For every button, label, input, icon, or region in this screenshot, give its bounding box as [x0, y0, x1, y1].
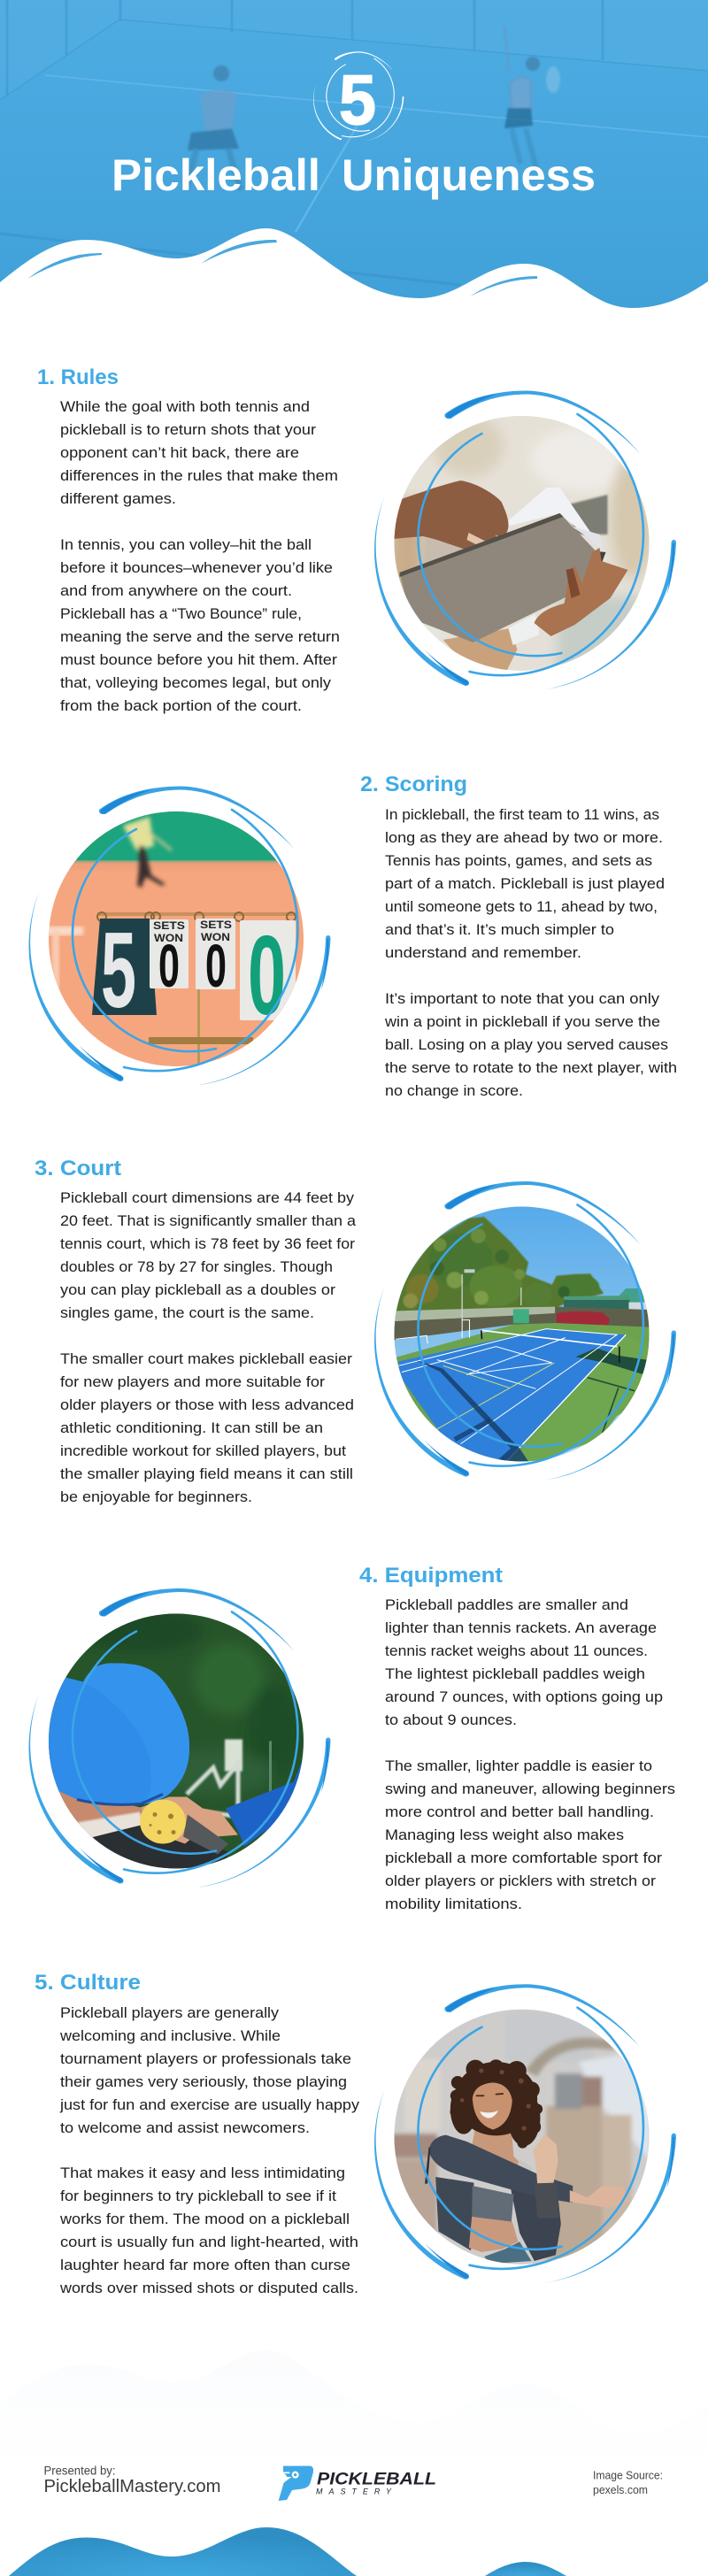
- text block: rules: pickleball is to return shots that your: [60, 421, 316, 438]
- text block: court: the smaller playing field means it can still: [60, 1465, 353, 1482]
- decorative image rings: [29, 786, 330, 1085]
- panel: court: [35, 1157, 676, 1505]
- curly hair: [450, 2059, 543, 2149]
- panel: scoring: [29, 773, 677, 1099]
- text block: rules: [60, 398, 340, 714]
- text block: court: The smaller court makes pickleball easier: [60, 1350, 352, 1367]
- text block: court: singles game, the court is the same.: [60, 1304, 314, 1321]
- text block: equipment: pickleball a more comfortable sport for: [385, 1849, 662, 1866]
- text block: culture: just for fun and exercise are usually happy: [59, 2096, 360, 2113]
- text block: scoring: the serve to rotate to the next player, with: [385, 1059, 677, 1076]
- footer credit: image source: [593, 2469, 663, 2496]
- text block: equipment: lighter than tennis rackets. An average: [385, 1619, 657, 1636]
- text block: culture: Pickleball players are generally: [60, 2004, 280, 2021]
- blurred player: [123, 817, 172, 888]
- text block: scoring: In pickleball, the first team to 11 wins, as: [385, 806, 659, 823]
- text block: culture: court is usually fun and light-hearted, with: [60, 2234, 358, 2250]
- text block: rules: before it bounces–whenever you’d like: [60, 559, 333, 576]
- number 5: 5: [339, 60, 376, 139]
- heading: rules: 1. Rules: [37, 365, 119, 389]
- decorative image rings: [374, 1984, 676, 2283]
- heading: court: 3. Court: [35, 1157, 121, 1180]
- logo: Pickleball Mastery: MASTERY: [316, 2487, 392, 2495]
- text block: rules: While the goal with both tennis and: [60, 398, 310, 415]
- text block: scoring: [384, 806, 677, 1099]
- text block: court: 20 feet. That is significantly smaller than a: [60, 1212, 357, 1229]
- photo: tennis scoreboard: WON: [201, 931, 230, 943]
- panel: equipment: [29, 1564, 675, 1912]
- footer credit: image source: Image Source:: [593, 2469, 663, 2481]
- text block: court: older players or those with less advanced: [60, 1396, 354, 1413]
- logo mark: [279, 2466, 313, 2501]
- text block: scoring: Tennis has points, games, and sets as: [385, 852, 652, 869]
- text block: culture: to welcome and assist newcomers.: [60, 2119, 310, 2136]
- text block: scoring: no change in score.: [385, 1082, 523, 1099]
- photo: blue paddle and yellow ball: [43, 1609, 309, 1874]
- text block: culture: laughter heard far more often than curse: [60, 2257, 350, 2273]
- footer credit: presented by: PickleballMastery.com: [44, 2477, 221, 2496]
- header photo: two players on a blue court: [0, 0, 708, 337]
- text block: scoring: win a point in pickleball if you serve the: [384, 1013, 660, 1030]
- text block: culture: That makes it easy and less intimidating: [60, 2165, 345, 2181]
- text block: scoring: long as they are ahead by two or more.: [385, 829, 663, 846]
- header banner: [0, 0, 708, 338]
- text block: equipment: The lightest pickleball paddles weigh: [385, 1665, 645, 1682]
- text block: rules: different games.: [60, 490, 176, 507]
- text block: scoring: and that’s it. It’s much simpler to: [385, 921, 614, 938]
- bottom wave: [9, 2527, 566, 2576]
- text block: rules: and from anywhere on the court.: [60, 582, 292, 599]
- number badge: [313, 51, 404, 142]
- decorative image rings: [374, 1181, 676, 1480]
- text block: rules: Pickleball has a “Two Bounce” rule,: [60, 605, 302, 622]
- text block: culture: [59, 2004, 360, 2296]
- text block: court: for new players and more suitable for: [60, 1373, 325, 1390]
- panel: rules: [37, 365, 676, 714]
- panel: culture: [35, 1971, 676, 2296]
- text block: equipment: [385, 1596, 675, 1912]
- text block: scoring: It’s important to note that you can only: [385, 990, 660, 1007]
- decorative image rings: [29, 1588, 330, 1888]
- text block: court: be enjoyable for beginners.: [60, 1488, 252, 1505]
- wave swooshes: [27, 240, 537, 296]
- text block: court: doubles or 78 by 27 for singles. Though: [60, 1258, 333, 1275]
- text block: equipment: Managing less weight also makes: [385, 1826, 624, 1843]
- text block: culture: welcoming and inclusive. While: [59, 2027, 281, 2044]
- text block: culture: tournament players or professionals take: [60, 2050, 351, 2067]
- number rings: [313, 51, 404, 142]
- text block: equipment: around 7 ounces, with options going up: [385, 1688, 663, 1705]
- text block: scoring: understand and remember.: [385, 944, 581, 961]
- text block: court: tennis court, which is 78 feet by 36 feet for: [60, 1235, 355, 1252]
- photo: tennis scoreboard: SETS: [153, 919, 185, 932]
- photo: tennis scoreboard: 5: [101, 910, 136, 1030]
- text block: equipment: older players or picklers with stretch or: [385, 1872, 656, 1889]
- text block: court: Pickleball court dimensions are 44 feet by: [60, 1189, 355, 1206]
- text block: rules: that, volleying becomes legal, but only: [60, 674, 332, 691]
- text block: scoring: ball. Losing on a play you served causes: [385, 1036, 668, 1053]
- text block: rules: opponent can’t hit back, there are: [60, 444, 299, 461]
- text block: equipment: mobility limitations.: [385, 1895, 522, 1912]
- text block: rules: meaning the serve and the serve return: [60, 628, 340, 645]
- text block: scoring: part of a match. Pickleball is just played: [385, 875, 665, 892]
- text block: equipment: swing and maneuver, allowing beginners: [385, 1780, 675, 1797]
- photo: tennis scoreboard: [43, 806, 309, 1072]
- title: Uniqueness: [342, 150, 596, 200]
- decorative image rings: [374, 391, 676, 690]
- text block: equipment: The smaller, lighter paddle is easier to: [385, 1757, 652, 1774]
- photo: tennis scoreboard: 0: [158, 932, 180, 1000]
- photo: outdoor blue court: [395, 1207, 650, 1462]
- text block: equipment: to about 9 ounces.: [385, 1711, 517, 1728]
- text block: court: incredible workout for skilled players, but: [60, 1442, 346, 1459]
- footer wave: faint background: [0, 2350, 708, 2469]
- footer credit: presented by: Presented by:: [44, 2464, 115, 2478]
- heading: culture: 5. Culture: [35, 1971, 141, 1995]
- title: [112, 150, 596, 200]
- footer credit: presented by: [44, 2464, 221, 2496]
- photo: tennis scoreboard: SETS: [200, 919, 232, 931]
- text block: court: [60, 1189, 357, 1505]
- wave divider: [0, 228, 708, 338]
- logo: Pickleball Mastery: [279, 2466, 436, 2501]
- text block: culture: for beginners to try pickleball to see if it: [60, 2188, 336, 2204]
- text block: rules: differences in the rules that make them: [60, 467, 338, 484]
- title: Pickleball: [112, 150, 320, 200]
- photo: tennis scoreboard: 0: [248, 912, 286, 1038]
- text block: rules: must bounce before you hit them. After: [60, 651, 337, 668]
- text block: culture: works for them. The mood on a pickleball: [59, 2211, 350, 2227]
- photo: smiling woman stretching: [395, 2009, 650, 2265]
- text block: equipment: Pickleball paddles are smaller and: [385, 1596, 628, 1613]
- text block: culture: their games very seriously, those playing: [60, 2073, 347, 2090]
- text block: culture: words over missed shots or disputed calls.: [59, 2280, 358, 2296]
- text block: court: you can play pickleball as a doubles or: [60, 1281, 335, 1298]
- photo: tennis scoreboard: 0: [205, 932, 227, 1000]
- logo wordmark: PICKLEBALL: [317, 2471, 436, 2488]
- text block: equipment: tennis racket weighs about 11 ounces.: [385, 1642, 648, 1659]
- text block: scoring: until someone gets to 11, ahead by two,: [385, 898, 658, 915]
- heading: equipment: 4. Equipment: [359, 1564, 503, 1588]
- heading: scoring: 2. Scoring: [360, 773, 467, 796]
- text block: equipment: more control and better ball handling.: [385, 1803, 654, 1820]
- photo: tennis scoreboard: WON: [154, 932, 183, 944]
- text block: rules: from the back portion of the court.: [60, 697, 302, 714]
- footer credit: image source: pexels.com: [593, 2483, 648, 2496]
- photo: hands holding a tablet and papers: [389, 411, 655, 676]
- text block: court: athletic conditioning. It can still be an: [60, 1419, 323, 1436]
- text block: rules: In tennis, you can volley–hit the ball: [60, 536, 312, 553]
